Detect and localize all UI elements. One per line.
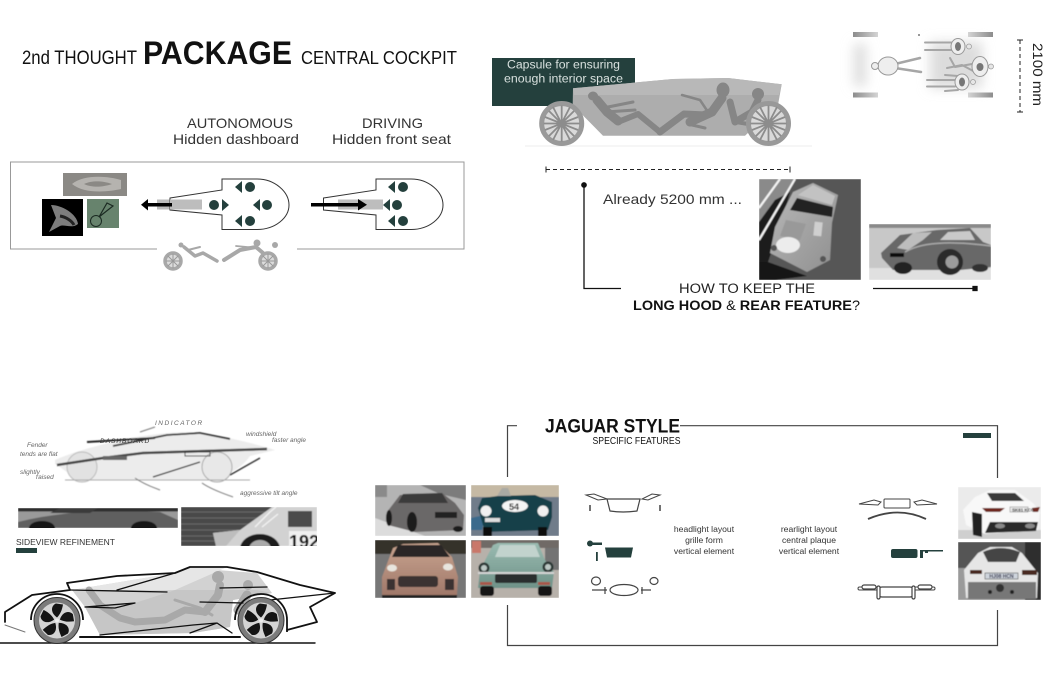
photo: f-type rear: [958, 487, 1041, 539]
dimension: width: 2100 mm: [1030, 43, 1045, 106]
photo: modern jaguar side: [18, 508, 178, 528]
interior reference images: [42, 173, 127, 236]
icon: modern rear lights: [859, 499, 937, 519]
text: key question: LONG HOOD & REAR FEATURE ?: [633, 298, 860, 313]
photo: f-type front: [375, 540, 466, 598]
pencil sketch: annotated sideview: faster angle: [272, 437, 306, 444]
pencil sketch: annotated sideview: INDICATOR: [155, 420, 204, 427]
dimension: length: [546, 166, 790, 172]
top view seating plan: [853, 32, 994, 98]
callout: capsule label: enough interior space: [504, 74, 623, 86]
icon: teal schematic front: [587, 540, 633, 561]
title: PACKAGE: [143, 35, 292, 71]
text: key question: [633, 281, 860, 313]
photo: f-type rear: SK61 KCC: [1012, 507, 1035, 512]
mode labels: DRIVING: [362, 115, 423, 131]
pencil sketch: annotated sideview: [20, 420, 306, 497]
photo: e-type rear: [958, 542, 1041, 600]
title: 2nd THOUGHT: [22, 48, 137, 69]
text: front features: [674, 524, 735, 556]
photo: classic race car: 192: [289, 532, 319, 552]
icon: teal schematic rear: [891, 549, 943, 558]
photo: classic race car: [181, 507, 319, 552]
text: front features: vertical element: [674, 546, 735, 556]
icon: classic grille and headlights: [592, 577, 658, 596]
mode labels: Hidden front seat: [332, 131, 451, 147]
text: rear features: central plaque: [782, 535, 836, 545]
pencil sketch: annotated sideview: slightly: [20, 469, 41, 476]
text: key question: HOW TO KEEP THE: [679, 281, 815, 296]
text: rear features: [779, 524, 840, 556]
photo: e-type from above: [759, 179, 861, 280]
accent bar: [963, 433, 991, 438]
icon: classic rear lights: [858, 585, 935, 599]
section label: sideview refinement: SIDEVIEW REFINEMENT: [16, 537, 115, 547]
panel: cockpit layouts: [10, 162, 464, 269]
pencil sketch: annotated sideview: DASHBOARD: [100, 438, 150, 445]
pencil sketch: annotated sideview: windshield: [246, 431, 277, 438]
text: front features: grille form: [685, 535, 723, 545]
text: rear features: vertical element: [779, 546, 840, 556]
pencil sketch: annotated sideview: raised: [36, 474, 54, 481]
photo: i-pace: [375, 485, 466, 536]
pencil sketch: annotated sideview: tends are flat: [20, 451, 59, 458]
dimension: width: [1017, 40, 1045, 112]
side view capsule with occupants: [525, 78, 812, 146]
section label: sideview refinement: [16, 537, 115, 553]
title: [22, 35, 457, 71]
heading: jaguar style: JAGUAR STYLE: [545, 416, 680, 438]
photo: e-type rear three-quarter: [869, 224, 991, 280]
heading: jaguar style: [545, 416, 681, 447]
mode labels: Hidden dashboard: [173, 131, 299, 147]
seated occupants diagram: [165, 240, 278, 269]
icons: front features: [586, 494, 660, 596]
photo: d-type racer: 54: [509, 502, 519, 512]
callout: capsule label: [492, 58, 635, 106]
section frame: [508, 426, 998, 646]
photo: e-type rear: HJ08 HCN: [989, 574, 1014, 580]
heading: jaguar style: SPECIFIC FEATURES: [592, 436, 681, 447]
mode labels: AUTONOMOUS: [187, 115, 293, 131]
question connector line: [582, 183, 977, 290]
layout: driving: [311, 179, 443, 230]
layout: autonomous: [141, 179, 289, 230]
callout: capsule label: Capsule for ensuring: [507, 60, 620, 72]
icons: rear features: [858, 499, 943, 599]
photo: d-type racer: [471, 485, 559, 536]
pencil sketch: annotated sideview: Fender: [27, 442, 48, 449]
text: length note: Already 5200 mm ...: [603, 191, 742, 207]
text: rear features: rearlight layout: [781, 524, 838, 534]
mode labels: [173, 115, 451, 147]
final sideview car sketch: [0, 567, 335, 644]
icon: modern grille and headlights: [586, 494, 660, 512]
photo: e-type front: [471, 540, 559, 598]
text: front features: headlight layout: [674, 524, 735, 534]
pencil sketch: annotated sideview: aggressive tilt angle: [240, 490, 298, 497]
title: CENTRAL COCKPIT: [301, 48, 457, 68]
